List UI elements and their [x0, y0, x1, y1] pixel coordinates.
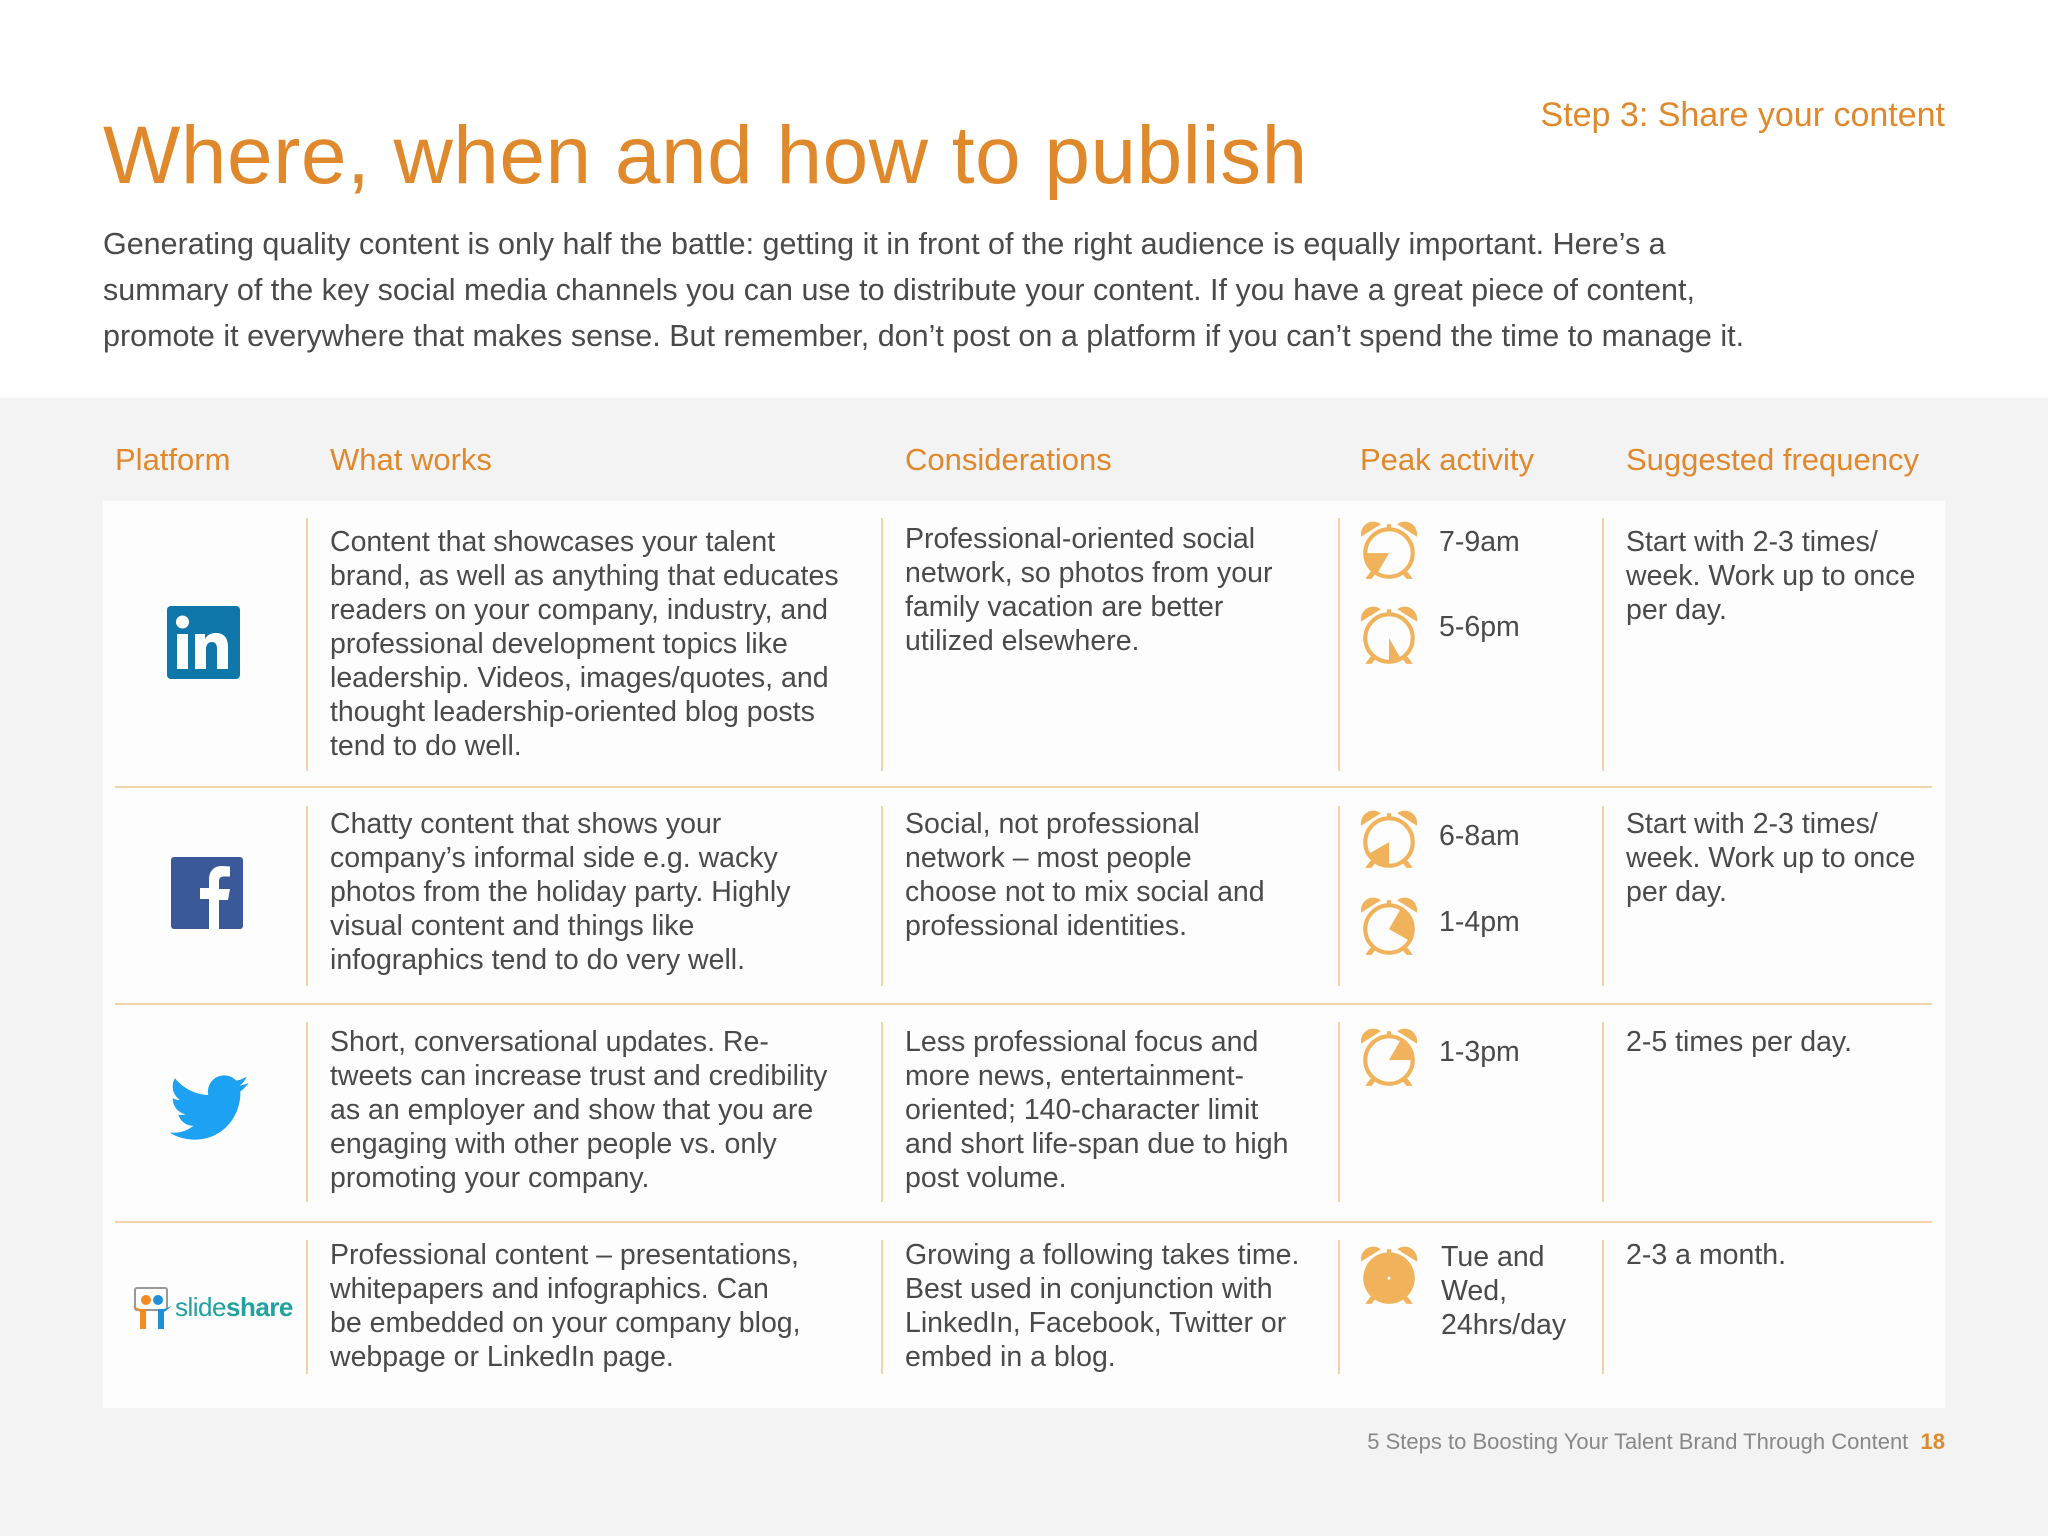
row: slideshare: Growing a following takes time.	[905, 1239, 1299, 1271]
row: slideshare: Best used in conjunction with	[905, 1273, 1273, 1305]
row: linkedin: utilized elsewhere.	[905, 625, 1139, 657]
row: twitter: tweets can increase trust and credibility	[330, 1060, 827, 1092]
step label: Step 3: Share your content	[1541, 96, 1945, 134]
intro paragraph: promote it everywhere that makes sense. But remember, don’t post on a platform if you can’t spend the time to manage it.	[103, 319, 1744, 353]
row: slideshare: Professional content – presentations,	[330, 1239, 799, 1271]
row: facebook: Start with 2-3 times/	[1626, 808, 1878, 840]
row: linkedin: brand, as well as anything that educates	[330, 560, 839, 592]
row: slideshare: 24hrs/day	[1441, 1309, 1566, 1341]
grey band	[0, 398, 2048, 1536]
icon: clock 7-9am	[1360, 522, 1418, 579]
row: facebook: per day.	[1626, 876, 1727, 908]
row: linkedin: tend to do well.	[330, 730, 522, 762]
icon: slideshare: slideshare	[175, 1292, 293, 1322]
row: facebook: professional identities.	[905, 910, 1187, 942]
row: slideshare	[132, 1239, 1786, 1373]
column headers: Considerations	[905, 442, 1112, 477]
row: linkedin: 5-6pm	[1439, 611, 1520, 643]
row: linkedin: week. Work up to once	[1626, 560, 1915, 592]
row: linkedin: Start with 2-3 times/	[1626, 526, 1878, 558]
row: twitter: 2-5 times per day.	[1626, 1026, 1852, 1058]
row: linkedin: 7-9am	[1439, 526, 1520, 558]
row: facebook: photos from the holiday party. Highly	[330, 876, 790, 908]
row: twitter: promoting your company.	[330, 1162, 649, 1194]
icon: clock 6-8am	[1360, 810, 1418, 868]
row: facebook: Chatty content that shows your	[330, 808, 721, 840]
row: slideshare: LinkedIn, Facebook, Twitter or	[905, 1307, 1286, 1339]
row: slideshare: Tue and	[1441, 1241, 1545, 1273]
row: linkedin: readers on your company, industry, and	[330, 594, 828, 626]
intro paragraph: summary of the key social media channels you can use to distribute your content. If you have a great piece of content,	[103, 273, 1695, 307]
icon: clock 1-4pm	[1360, 898, 1418, 955]
icon: facebook	[171, 857, 243, 929]
row: linkedin: professional development topics like	[330, 628, 788, 660]
icon: twitter	[170, 1075, 248, 1140]
icon: linkedin	[167, 606, 240, 679]
row: twitter	[170, 1026, 1852, 1194]
row: linkedin: thought leadership-oriented blog posts	[330, 696, 815, 728]
row: facebook	[171, 808, 1915, 976]
row: linkedin: per day.	[1626, 594, 1727, 626]
intro paragraph: Generating quality content is only half the battle: getting it in front of the right audience is equally important. Here’s a	[103, 227, 1666, 261]
row: twitter: Short, conversational updates. Re-	[330, 1026, 769, 1058]
row: slideshare: webpage or LinkedIn page.	[330, 1341, 674, 1373]
column headers: What works	[330, 442, 492, 477]
row: linkedin: network, so photos from your	[905, 557, 1272, 589]
intro paragraph	[103, 227, 1744, 353]
row: facebook: choose not to mix social and	[905, 876, 1265, 908]
title: Where, when and how to publish	[103, 110, 1308, 201]
row: facebook: Social, not professional	[905, 808, 1200, 840]
row: slideshare: 2-3 a month.	[1626, 1239, 1786, 1271]
column headers	[115, 442, 1919, 477]
row: twitter: and short life-span due to high	[905, 1128, 1288, 1160]
row: linkedin: Content that showcases your talent	[330, 526, 775, 558]
row: facebook: 6-8am	[1439, 820, 1520, 852]
icon: clock 1-3pm	[1360, 1028, 1418, 1086]
row: facebook: 1-4pm	[1439, 906, 1520, 938]
row: facebook: visual content and things like	[330, 910, 694, 942]
row: twitter: 1-3pm	[1439, 1036, 1520, 1068]
row: twitter: Less professional focus and	[905, 1026, 1258, 1058]
row: facebook: company’s informal side e.g. wacky	[330, 842, 778, 874]
row: facebook: network – most people	[905, 842, 1192, 874]
row: slideshare: whitepapers and infographics. Can	[330, 1273, 769, 1305]
row: twitter: oriented; 140-character limit	[905, 1094, 1258, 1126]
row: twitter: engaging with other people vs. only	[330, 1128, 777, 1160]
table panel	[103, 501, 1945, 1408]
row: linkedin	[167, 522, 1915, 762]
row: linkedin: Professional-oriented social	[905, 523, 1255, 555]
column headers: Peak activity	[1360, 442, 1534, 477]
icon: clock full	[1360, 1246, 1418, 1304]
row: twitter: more news, entertainment-	[905, 1060, 1244, 1092]
footer: 5 Steps to Boosting Your Talent Brand Through Content 18	[1367, 1429, 1945, 1454]
row: linkedin: family vacation are better	[905, 591, 1223, 623]
column headers: Platform	[115, 442, 230, 477]
icon: clock 5-6pm	[1360, 606, 1418, 664]
row: twitter: as an employer and show that you are	[330, 1094, 813, 1126]
row: facebook: week. Work up to once	[1626, 842, 1915, 874]
row: slideshare: embed in a blog.	[905, 1341, 1116, 1373]
row: slideshare: Wed,	[1441, 1275, 1507, 1307]
row: slideshare: be embedded on your company blog,	[330, 1307, 801, 1339]
icon: slideshare	[132, 1287, 293, 1329]
column headers: Suggested frequency	[1626, 442, 1919, 477]
row: facebook: infographics tend to do very well.	[330, 944, 745, 976]
row: twitter: post volume.	[905, 1162, 1067, 1194]
row: linkedin: leadership. Videos, images/quotes, and	[330, 662, 829, 694]
